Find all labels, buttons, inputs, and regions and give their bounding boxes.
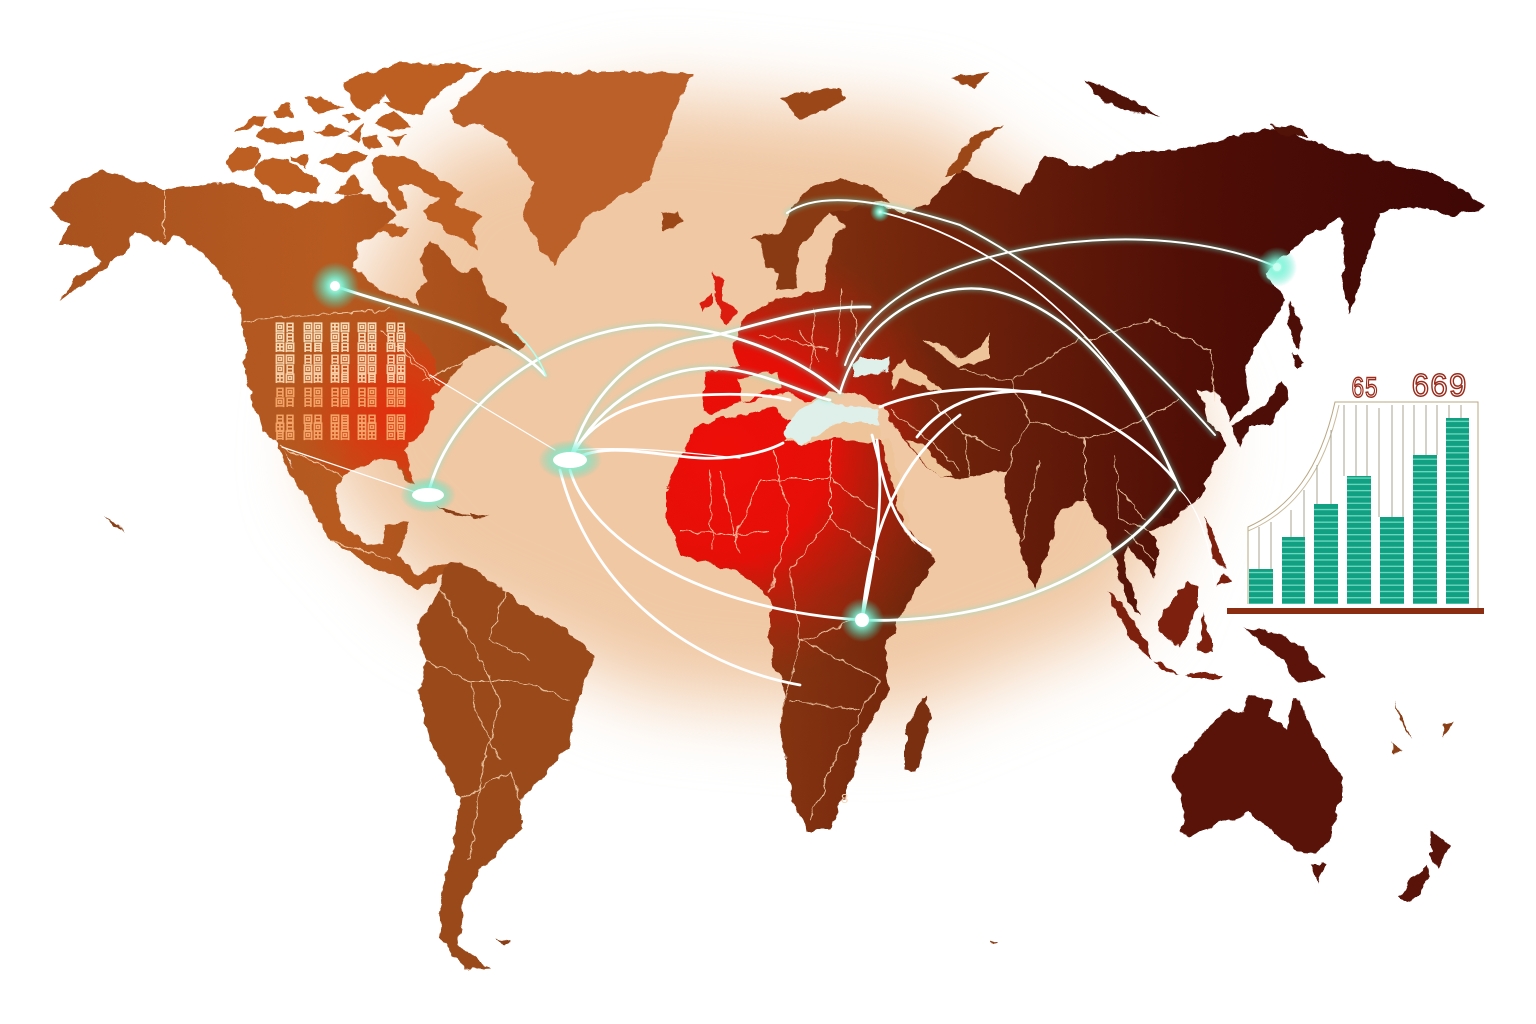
bar chart — [1227, 369, 1484, 614]
arc glow — [335, 200, 1277, 620]
islands: Tasmania and New Zealand — [1308, 832, 1450, 903]
data grid on North America: 回日日回日回日回回回 — [275, 397, 406, 409]
landmass: North America — [50, 170, 525, 590]
data grid on North America: 目回回田田回田田回目 — [275, 430, 406, 442]
data grid on North America: 日回日回日回日回回回 — [275, 387, 406, 399]
arc: East Africa to China — [862, 490, 1175, 620]
data grid on North America — [275, 322, 406, 442]
arc: Atlantic to Mediterranean — [570, 368, 830, 460]
landmass: Africa — [668, 408, 935, 830]
main arcs — [282, 200, 1277, 685]
islands: UK and Ireland — [700, 272, 738, 325]
data grid on North America: 回回日回日回回回日回 — [275, 354, 406, 366]
arc: Russia to China — [880, 212, 1172, 475]
islands: Caribbean and Pacific — [103, 505, 1455, 946]
data grid on North America: 回日回回田日回回回田 — [275, 364, 406, 376]
islands: Japan and Sakhalin — [1162, 300, 1305, 522]
landmass: Australia — [1173, 695, 1342, 853]
seas: Mediterranean and Black Sea — [783, 358, 890, 445]
arc: Atlantic to East Africa — [570, 470, 862, 620]
landmass: Scandinavia — [750, 177, 890, 290]
node: Far East — [1257, 247, 1297, 287]
peach glow behind map — [320, 95, 1205, 715]
chart frame and curve — [1248, 402, 1478, 608]
data grid on North America: 日日回日回目田日回回 — [275, 414, 406, 426]
arc: Atlantic short — [570, 394, 790, 455]
arc: Europe to China — [840, 288, 1180, 490]
arc: East Africa to Middle East — [862, 415, 960, 620]
landmass: Eurasia — [703, 128, 1487, 617]
number in southern Africa: 8 — [841, 791, 848, 806]
landmass: South America — [418, 562, 596, 970]
red highlight: Africa and Europe — [668, 128, 1487, 830]
chart value: 669: 669 — [1411, 369, 1467, 406]
node: Atlantic — [538, 440, 602, 480]
node: Scandinavia — [870, 202, 890, 222]
islands: Iceland and northern islands — [660, 72, 1005, 232]
arc: Atlantic to eastern Europe — [570, 307, 870, 460]
arc: North America to Atlantic — [335, 286, 545, 375]
data grid on North America: 回日回回田回回回回日 — [275, 322, 406, 334]
arc: Caribbean to Europe — [428, 325, 840, 495]
node: North America — [311, 262, 359, 310]
data grid on North America: 田日目回田目田回回回 — [275, 422, 406, 434]
seas: beige inland areas — [738, 335, 990, 545]
landmass: Arctic archipelago — [227, 63, 483, 250]
red highlight: United States — [245, 300, 445, 485]
white chart backing — [1248, 402, 1478, 608]
islands: Arctic Siberia — [1085, 80, 1310, 136]
arc: cyan thin — [515, 332, 546, 376]
chart baseline — [1227, 608, 1484, 614]
islands: Madagascar — [905, 695, 931, 772]
arc: thin routes — [282, 375, 1215, 590]
data grid on North America: 田回回田田目田目目回 — [275, 373, 406, 385]
data grid on North America: 田回日目目日回田回目 — [275, 342, 406, 354]
connection arcs — [282, 200, 1277, 685]
landmass: Greenland — [450, 72, 692, 265]
arc: Mediterranean to China — [880, 389, 1175, 480]
node: East Africa — [840, 598, 884, 642]
islands: Southeast Asia — [1107, 517, 1232, 680]
country borders — [165, 190, 1215, 860]
islands: New Guinea — [1243, 627, 1323, 682]
node: Caribbean — [400, 477, 456, 513]
chart value: 65: 65 — [1351, 373, 1378, 407]
data grid on North America: 回日回回回日日回日回 — [275, 332, 406, 344]
arc: Far East to Europe — [845, 239, 1277, 365]
arc: Atlantic to southern Africa — [560, 470, 800, 685]
arc: Scandinavia to Japan — [787, 200, 1215, 435]
bars — [1249, 569, 1273, 604]
arc: Atlantic to North Africa — [570, 443, 783, 462]
